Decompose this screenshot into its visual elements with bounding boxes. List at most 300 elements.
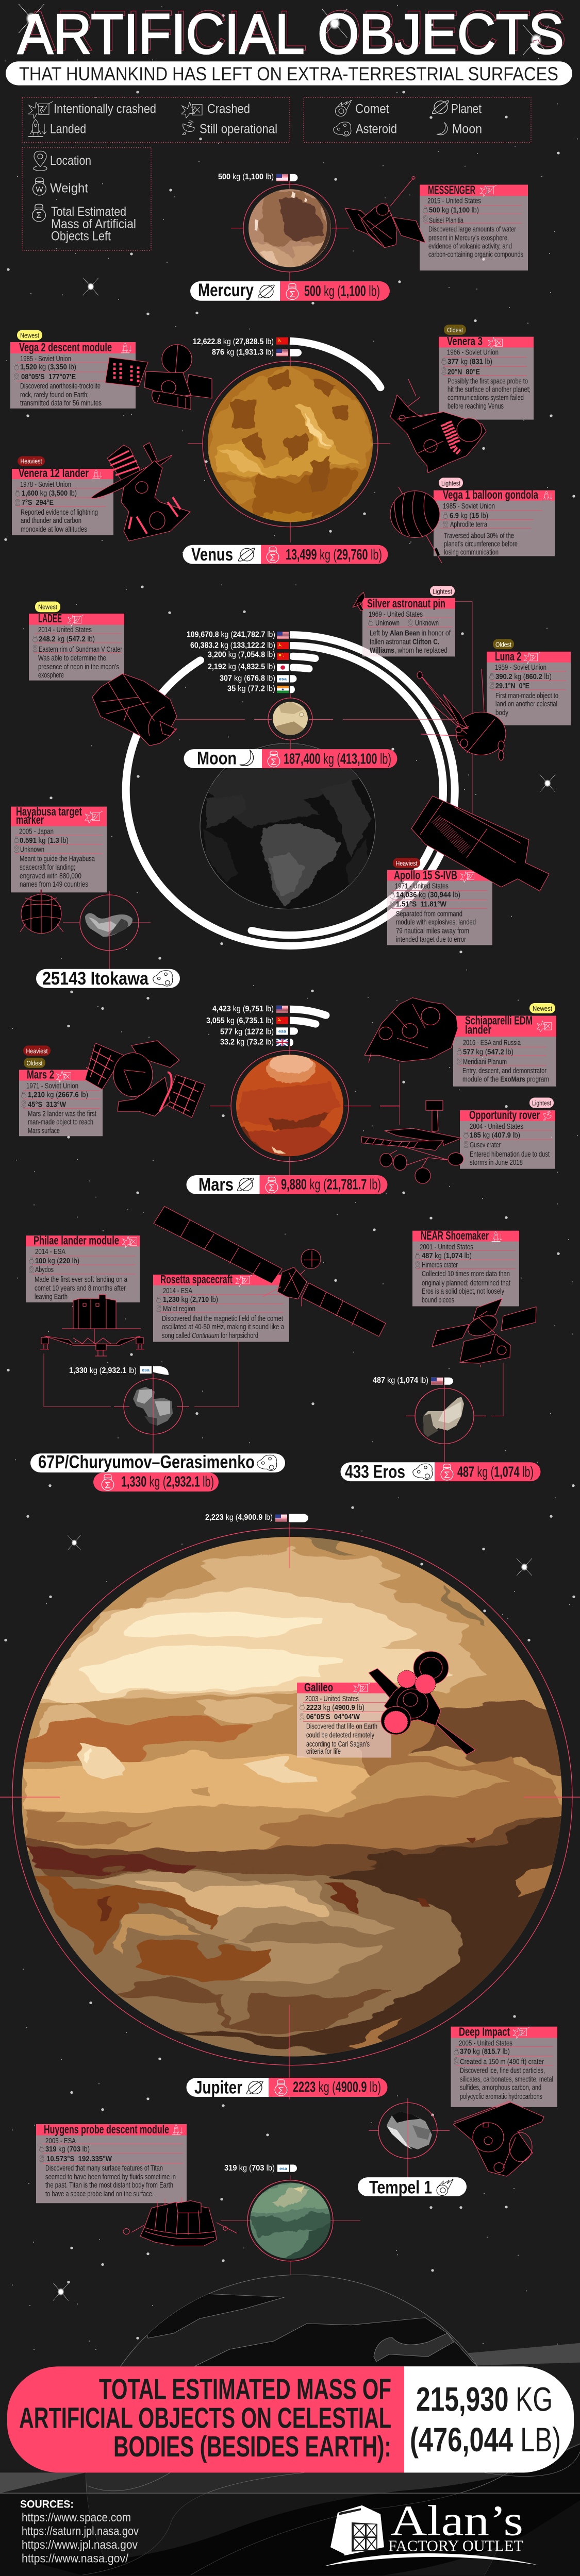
icon: crashed — [488, 337, 502, 349]
panel: Vega 2 descent module — [10, 330, 136, 409]
facts: 2016 - ESA and Russia — [463, 1039, 521, 1047]
label: still operational: Still operational — [200, 122, 277, 136]
sources — [20, 2498, 139, 2565]
description: could be detected remotely — [306, 1731, 374, 1740]
facts: 577 kg (547.2 lb) — [463, 1048, 513, 1056]
facts: Suisei Planitia — [429, 216, 463, 225]
icon: crashed — [537, 1021, 551, 1032]
body: 67P/Churyumov-Gerasimenko — [114, 1374, 189, 1453]
description: Meant to guide the Hayabusa — [20, 855, 95, 863]
badge: heaviest — [23, 1045, 51, 1056]
description — [444, 532, 518, 557]
description: Mars 2 lander was the first — [28, 1110, 96, 1118]
facts: Eastern rim of Sundman V Crater — [39, 645, 122, 654]
description — [460, 2066, 553, 2101]
icon: weight — [33, 178, 46, 195]
panel: Venera 12 lander — [12, 456, 113, 535]
description: engraved with 880,000 — [20, 872, 81, 880]
label: landed: Landed — [50, 122, 86, 136]
facts: 2014 - United States — [38, 625, 92, 634]
facts: 0.591 kg (1.3 lb) — [20, 836, 69, 845]
facts: 1971 - United States — [395, 882, 449, 891]
banner value: (476,044 LB) — [410, 2421, 561, 2459]
description — [495, 691, 558, 717]
pill: 67P/Churyumov–Gerasimenko: 67P/Churyumov–Gerasimenko — [38, 1452, 255, 1472]
icon: intentionally crashed — [68, 615, 84, 626]
pill: Jupiter: Jupiter — [194, 2077, 242, 2097]
icon: intentionally crashed — [460, 871, 477, 883]
pill: Moon: 187,400 kg (413,100 lb) — [284, 751, 391, 767]
moon arcs chart — [126, 629, 455, 946]
icon: planet — [432, 101, 449, 114]
badge: newest: Newest — [20, 332, 39, 340]
facts: 1985 - Soviet Union — [20, 354, 71, 363]
legend: measures — [22, 148, 151, 250]
facts — [367, 610, 453, 628]
facts: 1,600 kg (3,500 lb) — [22, 489, 77, 498]
label: intentionally crashed: Intentionally crashed — [54, 102, 156, 116]
description: before reaching Venus — [448, 402, 504, 411]
description — [462, 1067, 549, 1083]
earth backdrop — [200, 743, 375, 909]
facts: 1,210 kg (2667.6 lb) — [28, 1091, 88, 1099]
facts — [439, 502, 542, 529]
facts: 1,230 kg (2,710 lb) — [163, 1295, 218, 1304]
pill: Mars — [187, 1174, 388, 1195]
label: total mass: Mass of Artificial — [51, 217, 136, 231]
description: song called Continuum for harpsichord — [162, 1331, 258, 1340]
description: Possibly the first space probe to — [448, 377, 528, 385]
chart: Jupiter mass label — [205, 1512, 308, 1522]
facts: 45°S 313°W — [28, 1100, 66, 1109]
description: communications system failed — [448, 394, 524, 402]
description: Collected 10 times more data than — [422, 1269, 510, 1278]
icon: intentionally crashed — [28, 101, 53, 118]
connector lines: Eros — [491, 1363, 503, 1416]
flag gutter mask — [273, 629, 290, 694]
icon: intentionally crashed — [85, 811, 103, 823]
pill: Moon: Σ — [271, 756, 277, 767]
data arc: United States — [126, 635, 455, 946]
description: and thunder and carbon — [21, 517, 81, 525]
facts: Abydos — [35, 1266, 54, 1274]
label: asteroid: Asteroid — [356, 122, 397, 136]
facts — [390, 882, 487, 909]
description: sulfides, amorphous carbon, and — [460, 2083, 541, 2092]
body: Tempel 1 — [369, 2098, 450, 2177]
heading: Apollo 15 S-IVB — [394, 869, 457, 882]
heading: Luna 2 — [495, 650, 521, 663]
pill: 67P total mass: Σ — [105, 1480, 111, 1490]
description — [38, 654, 119, 680]
spacecraft: Venera 12 lander — [91, 443, 190, 541]
heading: Schiaparelli EDM — [465, 1014, 533, 1027]
description — [45, 2164, 176, 2198]
facts: 390.2 kg (860.2 lb) — [495, 672, 552, 681]
panel: Huygens probe descent module — [36, 2123, 187, 2203]
chart: Mars mass by country — [206, 1004, 330, 1046]
connector lines: moon — [455, 601, 472, 819]
panel: Opportunity rover — [460, 1098, 555, 1169]
pill: 433 Eros: Σ — [444, 1469, 450, 1480]
description — [28, 1110, 96, 1136]
data row: United States: 4,423 kg (9,751 lb) — [212, 1004, 274, 1013]
legend: body types — [304, 97, 531, 142]
facts: 100 kg (220 lb) — [35, 1257, 79, 1265]
facts: Aphrodite terra — [450, 520, 487, 529]
logo swoosh — [324, 2553, 539, 2566]
heading: Galileo — [304, 1681, 333, 1694]
description — [20, 382, 102, 408]
description — [470, 1150, 550, 1167]
facts: 20°N 80°E — [448, 368, 480, 376]
facts — [441, 348, 527, 376]
icon: still operational — [543, 1111, 551, 1120]
panel: Galileo — [297, 1681, 391, 1758]
description: presence of neon in the moon’s — [38, 663, 119, 671]
facts: 2015 - United States — [427, 197, 481, 205]
icon: intentionally crashed — [236, 1275, 252, 1286]
description: Discovered that the magnetic field of the comet — [162, 1314, 283, 1323]
description: 79 nautical miles away from — [396, 927, 469, 936]
heading: lander — [465, 1023, 491, 1036]
chart: 67P mass label: 1,330 kg (2,932.1 lb) — [69, 1366, 137, 1375]
description: bound pieces — [422, 1296, 454, 1304]
banner heading: ARTIFICIAL OBJECTS ON CELESTIAL — [19, 2402, 391, 2434]
facts — [157, 1286, 284, 1313]
icon: location — [34, 151, 47, 171]
pill: Jupiter: Σ — [278, 2085, 284, 2095]
description: Discovered large amounts of water — [428, 225, 516, 233]
facts: 7°S 294°E — [22, 498, 54, 507]
description — [428, 225, 523, 259]
heading — [16, 805, 82, 826]
facts: 1.51°S 11.81°W — [396, 900, 446, 909]
facts — [464, 1122, 553, 1149]
heading: Vega 1 balloon gondola — [443, 488, 539, 501]
description: comet 10 years and 8 months after — [35, 1284, 126, 1293]
facts: 1971 - Soviet Union — [26, 1082, 78, 1090]
description: hit the surface of another planet; — [448, 385, 531, 394]
panel: NEAR Shoemaker — [412, 1229, 519, 1306]
spacecraft: Luna 2 — [417, 669, 506, 760]
label: total mass: Objects Left — [51, 229, 111, 243]
panel: Mars 2 — [19, 1045, 103, 1136]
description: losing communication — [444, 548, 499, 557]
facts — [490, 663, 566, 690]
facts: 248.2 kg (547.2 lb) — [39, 635, 95, 643]
facts: 1985 - Soviet Union — [443, 502, 495, 511]
data row: United States — [212, 1004, 330, 1019]
data row: ESA: 577 kg (1272 lb) — [220, 1027, 274, 1036]
badge: lightest: Lightest — [433, 588, 452, 595]
icon: landed — [543, 491, 552, 500]
facts: 10.573°S 192.335°W — [46, 2155, 112, 2163]
banner heading — [19, 2373, 391, 2463]
spacecraft: Rosetta — [154, 1207, 386, 1336]
heading: NEAR Shoemaker — [421, 1229, 489, 1242]
facts: Unknown — [375, 619, 400, 628]
spacecraft: Philae lander — [40, 1295, 144, 1356]
description — [35, 1276, 127, 1301]
facts: Unknown — [20, 845, 44, 854]
facts — [22, 1082, 100, 1109]
heading: marker — [16, 813, 44, 826]
facts: 2001 - United States — [420, 1243, 473, 1251]
bottom planet with rings — [0, 2275, 580, 2575]
description: transmitted data for 56 minutes — [20, 399, 102, 408]
spacecraft: Apollo 15 S-IVB — [411, 796, 549, 891]
chart: 67P mass label: esa — [142, 1367, 150, 1372]
description: Made the first ever soft landing on a — [35, 1276, 127, 1284]
spacecraft: Venera 3 — [390, 379, 486, 473]
description: intended target due to error — [396, 935, 466, 944]
description: names from 149 countries — [20, 880, 88, 889]
badge: oldest — [493, 639, 514, 649]
badge: heaviest: Heaviest — [396, 860, 418, 867]
pill: Mars: Mars — [198, 1174, 234, 1195]
facts — [33, 625, 122, 654]
facts — [14, 354, 131, 381]
description: planet’s circumference before — [444, 540, 518, 548]
logo: Alan's Factory Outlet — [324, 2497, 539, 2566]
data arc: Soviet Union — [252, 646, 443, 935]
facts — [29, 1248, 136, 1274]
facts: 487 kg (1,074 lb) — [422, 1251, 472, 1260]
badge: heaviest: Heaviest — [26, 1047, 48, 1055]
description — [370, 629, 451, 655]
description: Traversed about 30% of the — [444, 532, 514, 540]
chart: Titan mass label: 319 kg (703 lb) — [224, 2163, 275, 2173]
description: to have a space probe land on the surface. — [45, 2190, 154, 2198]
pill: Jupiter — [187, 2077, 388, 2097]
icon: moon — [437, 122, 448, 135]
sources: https://www.jpl.nasa.gov — [22, 2538, 138, 2551]
facts: 2003 - United States — [305, 1694, 359, 1703]
heading: Venera 12 lander — [19, 467, 89, 480]
description: Discovered anorthosite-troctolite — [20, 382, 101, 391]
pill: 67P total mass: 1,330 kg (2,932.1 lb) — [121, 1474, 214, 1490]
facts: 2005 - ESA — [45, 2137, 76, 2145]
facts: 500 kg (1,100 lb) — [429, 206, 479, 214]
description: Williams, whom he replaced — [370, 646, 448, 655]
icon: barn — [330, 2505, 384, 2555]
pill: Mercury: 500 kg (1,100 lb) — [304, 283, 380, 299]
data label: ESA: 307 kg (676.8 lb) — [220, 673, 275, 683]
logo wordmark: Alan’s — [390, 2497, 523, 2545]
description: Reported evidence of lightning — [21, 508, 98, 517]
facts: 2004 - United States — [470, 1122, 523, 1131]
facts — [15, 480, 106, 507]
badge: heaviest — [18, 456, 45, 466]
pill: Mercury: Σ — [289, 289, 295, 299]
spacecraft: NEAR Shoemaker — [432, 1298, 536, 1367]
icon: comet — [335, 100, 352, 116]
badge: lightest — [430, 586, 455, 596]
heading: Hayabusa target — [16, 805, 82, 818]
badge: lightest — [439, 478, 463, 488]
data label: ESA: esa — [279, 676, 287, 682]
planet: Venus — [188, 356, 390, 543]
description: leaving Earth — [35, 1293, 68, 1301]
spacecraft: Mars 2 — [85, 1041, 205, 1117]
description: Discovered that life on Earth — [306, 1722, 377, 1731]
facts: 29.1°N 0°E — [495, 682, 529, 690]
facts: 377 kg (831 lb) — [448, 358, 492, 366]
data arc: India — [290, 686, 295, 693]
heading: Rosetta spacecraft — [160, 1273, 233, 1286]
description: Discovered that many surface features of Titan — [45, 2164, 163, 2173]
description: spacecraft for landing; — [20, 863, 75, 872]
pill: 433 Eros: 487 kg (1,074 lb) — [457, 1464, 534, 1480]
badge: lightest: Lightest — [532, 1099, 551, 1107]
badge: newest — [17, 330, 42, 340]
icon: intentionally crashed — [524, 652, 540, 664]
pill: 433 Eros: 433 Eros — [345, 1461, 405, 1482]
facts: Unknown — [415, 619, 439, 628]
pill: Tempel 1: Tempel 1 — [369, 2177, 432, 2197]
icon: intentionally crashed — [354, 1683, 370, 1694]
badge: lightest: Lightest — [441, 480, 460, 487]
facts: 1978 - Soviet Union — [20, 480, 71, 489]
spacecraft: Schiaparelli — [364, 998, 458, 1062]
facts: 319 kg (703 lb) — [45, 2145, 90, 2154]
facts: Gusev crater — [470, 1141, 501, 1149]
pill: Mercury — [190, 280, 390, 301]
description: Separated from command — [396, 910, 462, 919]
pill: 433 Eros — [340, 1461, 540, 1482]
label: weight: Weight — [50, 181, 88, 196]
facts — [300, 1694, 387, 1722]
heading: Vega 2 descent module — [19, 341, 112, 354]
description: man-made object to reach — [28, 1118, 93, 1126]
panel: Philae lander module — [26, 1234, 140, 1302]
banner value — [410, 2380, 561, 2459]
panel: Rosetta spacecraft — [153, 1273, 289, 1342]
sources: https://www.nasa.gov/ — [22, 2552, 128, 2565]
badge: heaviest — [393, 858, 420, 868]
pill: Venus: Venus — [191, 544, 233, 565]
data label: Soviet Union: 60,383.2 kg (133,122.2 lb) — [190, 640, 275, 650]
description: criteria for life — [306, 1747, 341, 1756]
panel: Luna 2 — [487, 639, 571, 725]
data arc: China — [293, 656, 315, 658]
sources: SOURCES: — [20, 2498, 74, 2510]
footer band — [0, 2493, 580, 2576]
icon: crashed — [56, 1071, 71, 1082]
description: fallen astronaut Clifton C. — [370, 638, 439, 647]
description: according to Carl Sagan’s — [306, 1740, 370, 1749]
heading: LADEE — [38, 612, 62, 625]
description: module of the ExoMars program — [462, 1075, 549, 1083]
label: crashed: Crashed — [207, 102, 250, 116]
badge: oldest — [444, 325, 466, 335]
planet: Moon — [173, 693, 462, 749]
facts: Ma’at region — [163, 1304, 195, 1313]
facts — [14, 827, 103, 854]
icon: landed — [121, 343, 131, 353]
icon: astronaut pin — [353, 592, 365, 611]
facts — [416, 1243, 516, 1269]
icon: total mass: Σ — [36, 210, 42, 220]
facts — [423, 197, 522, 225]
description: present in Mercury’s exosphere, — [428, 234, 509, 242]
spacecraft: Hayabusa target marker — [20, 890, 63, 934]
spacecraft: Huygens probe — [123, 2197, 237, 2246]
chart: Venus mass by country — [193, 336, 385, 391]
panel: Apollo 15 S-IVB — [387, 858, 492, 945]
pill: Moon: Moon — [197, 748, 237, 768]
description: monoxide at low altitudes — [21, 526, 87, 534]
facts: 2014 - ESA — [35, 1248, 65, 1256]
badge: heaviest: Heaviest — [21, 457, 42, 465]
banner heading: BODIES (BESIDES EARTH): — [113, 2431, 391, 2463]
facts: 1,520 kg (3,350 lb) — [20, 363, 76, 371]
banner heading: TOTAL ESTIMATED MASS OF — [99, 2373, 391, 2405]
facts: Himeros crater — [422, 1261, 458, 1269]
label: total mass: Total Estimated — [51, 205, 126, 219]
data row: ESA: esa — [278, 1029, 286, 1034]
badge: oldest — [24, 1058, 45, 1068]
facts: 1969 - United States — [369, 610, 423, 619]
facts: 185 kg (407.9 lb) — [470, 1131, 520, 1140]
icon: asteroid — [334, 122, 351, 136]
label: location: Location — [50, 154, 91, 168]
pill: Jupiter: 2223 kg (4900.9 lb) — [293, 2079, 381, 2095]
data arc: ESA — [290, 675, 297, 683]
pill: 25143 Itokawa: 25143 Itokawa — [42, 968, 149, 989]
icon: landed — [92, 470, 102, 479]
sources: https://www.space.com — [22, 2511, 131, 2524]
data row: United Kingdom: 33.2 kg (73.2 lb) — [220, 1037, 274, 1046]
icon: intentionally crashed — [513, 2027, 529, 2039]
spacecraft: Galileo — [369, 1651, 475, 1755]
facts: 2005 - United States — [459, 2039, 512, 2048]
icon: landed — [28, 120, 46, 137]
icon: crashed — [181, 102, 202, 118]
data row: Soviet Union — [193, 336, 385, 391]
heading: Huygens probe descent module — [44, 2123, 169, 2136]
heading: Opportunity rover — [469, 1109, 540, 1122]
badge: oldest: Oldest — [447, 327, 463, 334]
panel: MESSENGER — [420, 183, 528, 270]
pill: Moon — [184, 748, 397, 768]
description: Mars surface — [28, 1127, 60, 1136]
heading: Deep Impact — [459, 2025, 510, 2039]
description — [20, 855, 95, 889]
data arc: Japan — [293, 668, 309, 669]
icon: weight: W — [36, 185, 43, 194]
description — [396, 910, 476, 944]
icon: total mass — [32, 204, 45, 222]
description: evidence of volcanic activity, and — [428, 242, 512, 250]
icon: still operational — [183, 121, 194, 134]
heading — [465, 1014, 533, 1036]
banner value: 215,930 KG — [416, 2380, 553, 2418]
spacecraft: Deep Impact — [453, 2101, 544, 2176]
chart: 67P mass label — [69, 1366, 169, 1375]
description: storms in June 2018 — [470, 1158, 523, 1167]
heading: Silver astronaut pin — [367, 597, 445, 610]
planet: Mercury — [231, 180, 349, 281]
facts: 2223 kg (4900.9 lb) — [306, 1703, 364, 1712]
description: carbon-containing organic compounds — [428, 250, 523, 259]
pill: Venus — [183, 544, 388, 565]
planet: Jupiter — [0, 1523, 580, 2099]
description: the past. Titan is the most distant body from Earth — [45, 2181, 173, 2190]
pill: Mercury: Mercury — [198, 280, 254, 300]
description: rock, rarely found on Earth; — [20, 391, 89, 399]
